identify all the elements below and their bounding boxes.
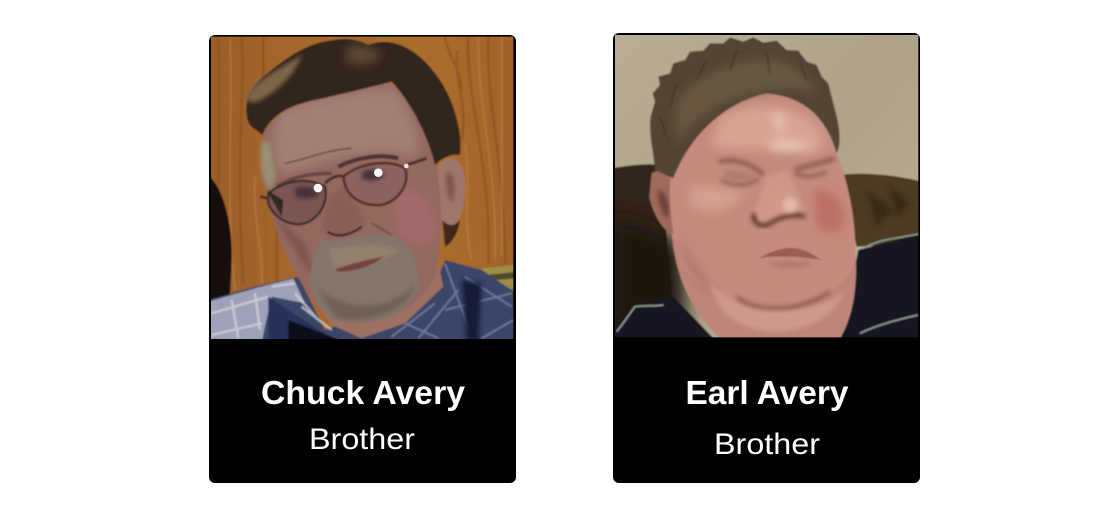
beard	[310, 234, 419, 323]
sofa	[615, 164, 672, 330]
ear	[648, 170, 674, 234]
glasses	[268, 181, 326, 224]
shirt	[208, 260, 517, 342]
card: Chuck Avery	[208, 33, 517, 483]
nose	[756, 172, 804, 222]
mouth	[336, 257, 383, 272]
lens glints	[314, 184, 322, 192]
photo: Chuck Avery	[208, 33, 517, 342]
photo: Earl Avery	[612, 32, 922, 342]
name: Earl Avery: Earl Avery	[686, 374, 849, 411]
nose	[326, 192, 360, 234]
card background	[209, 35, 516, 483]
brows and wrinkles	[338, 156, 398, 167]
neck	[312, 263, 443, 338]
brows and eyes	[718, 158, 835, 175]
hair	[650, 37, 840, 178]
yellow cushion	[482, 265, 517, 290]
dark figure at left edge	[208, 175, 232, 300]
hair	[246, 39, 461, 165]
name: Chuck Avery: Chuck Avery	[261, 374, 466, 411]
face	[263, 80, 441, 323]
infographic canvas	[209, 33, 920, 483]
role: Brother: Brother	[714, 428, 820, 461]
shirt	[612, 233, 922, 342]
ear	[438, 158, 465, 227]
card: Earl Avery	[612, 32, 922, 483]
face	[669, 93, 856, 250]
chin crease	[737, 292, 830, 308]
card background	[613, 33, 920, 483]
mouth	[758, 248, 822, 260]
role: Brother: Brother	[309, 423, 415, 456]
neck and chin	[672, 233, 856, 338]
